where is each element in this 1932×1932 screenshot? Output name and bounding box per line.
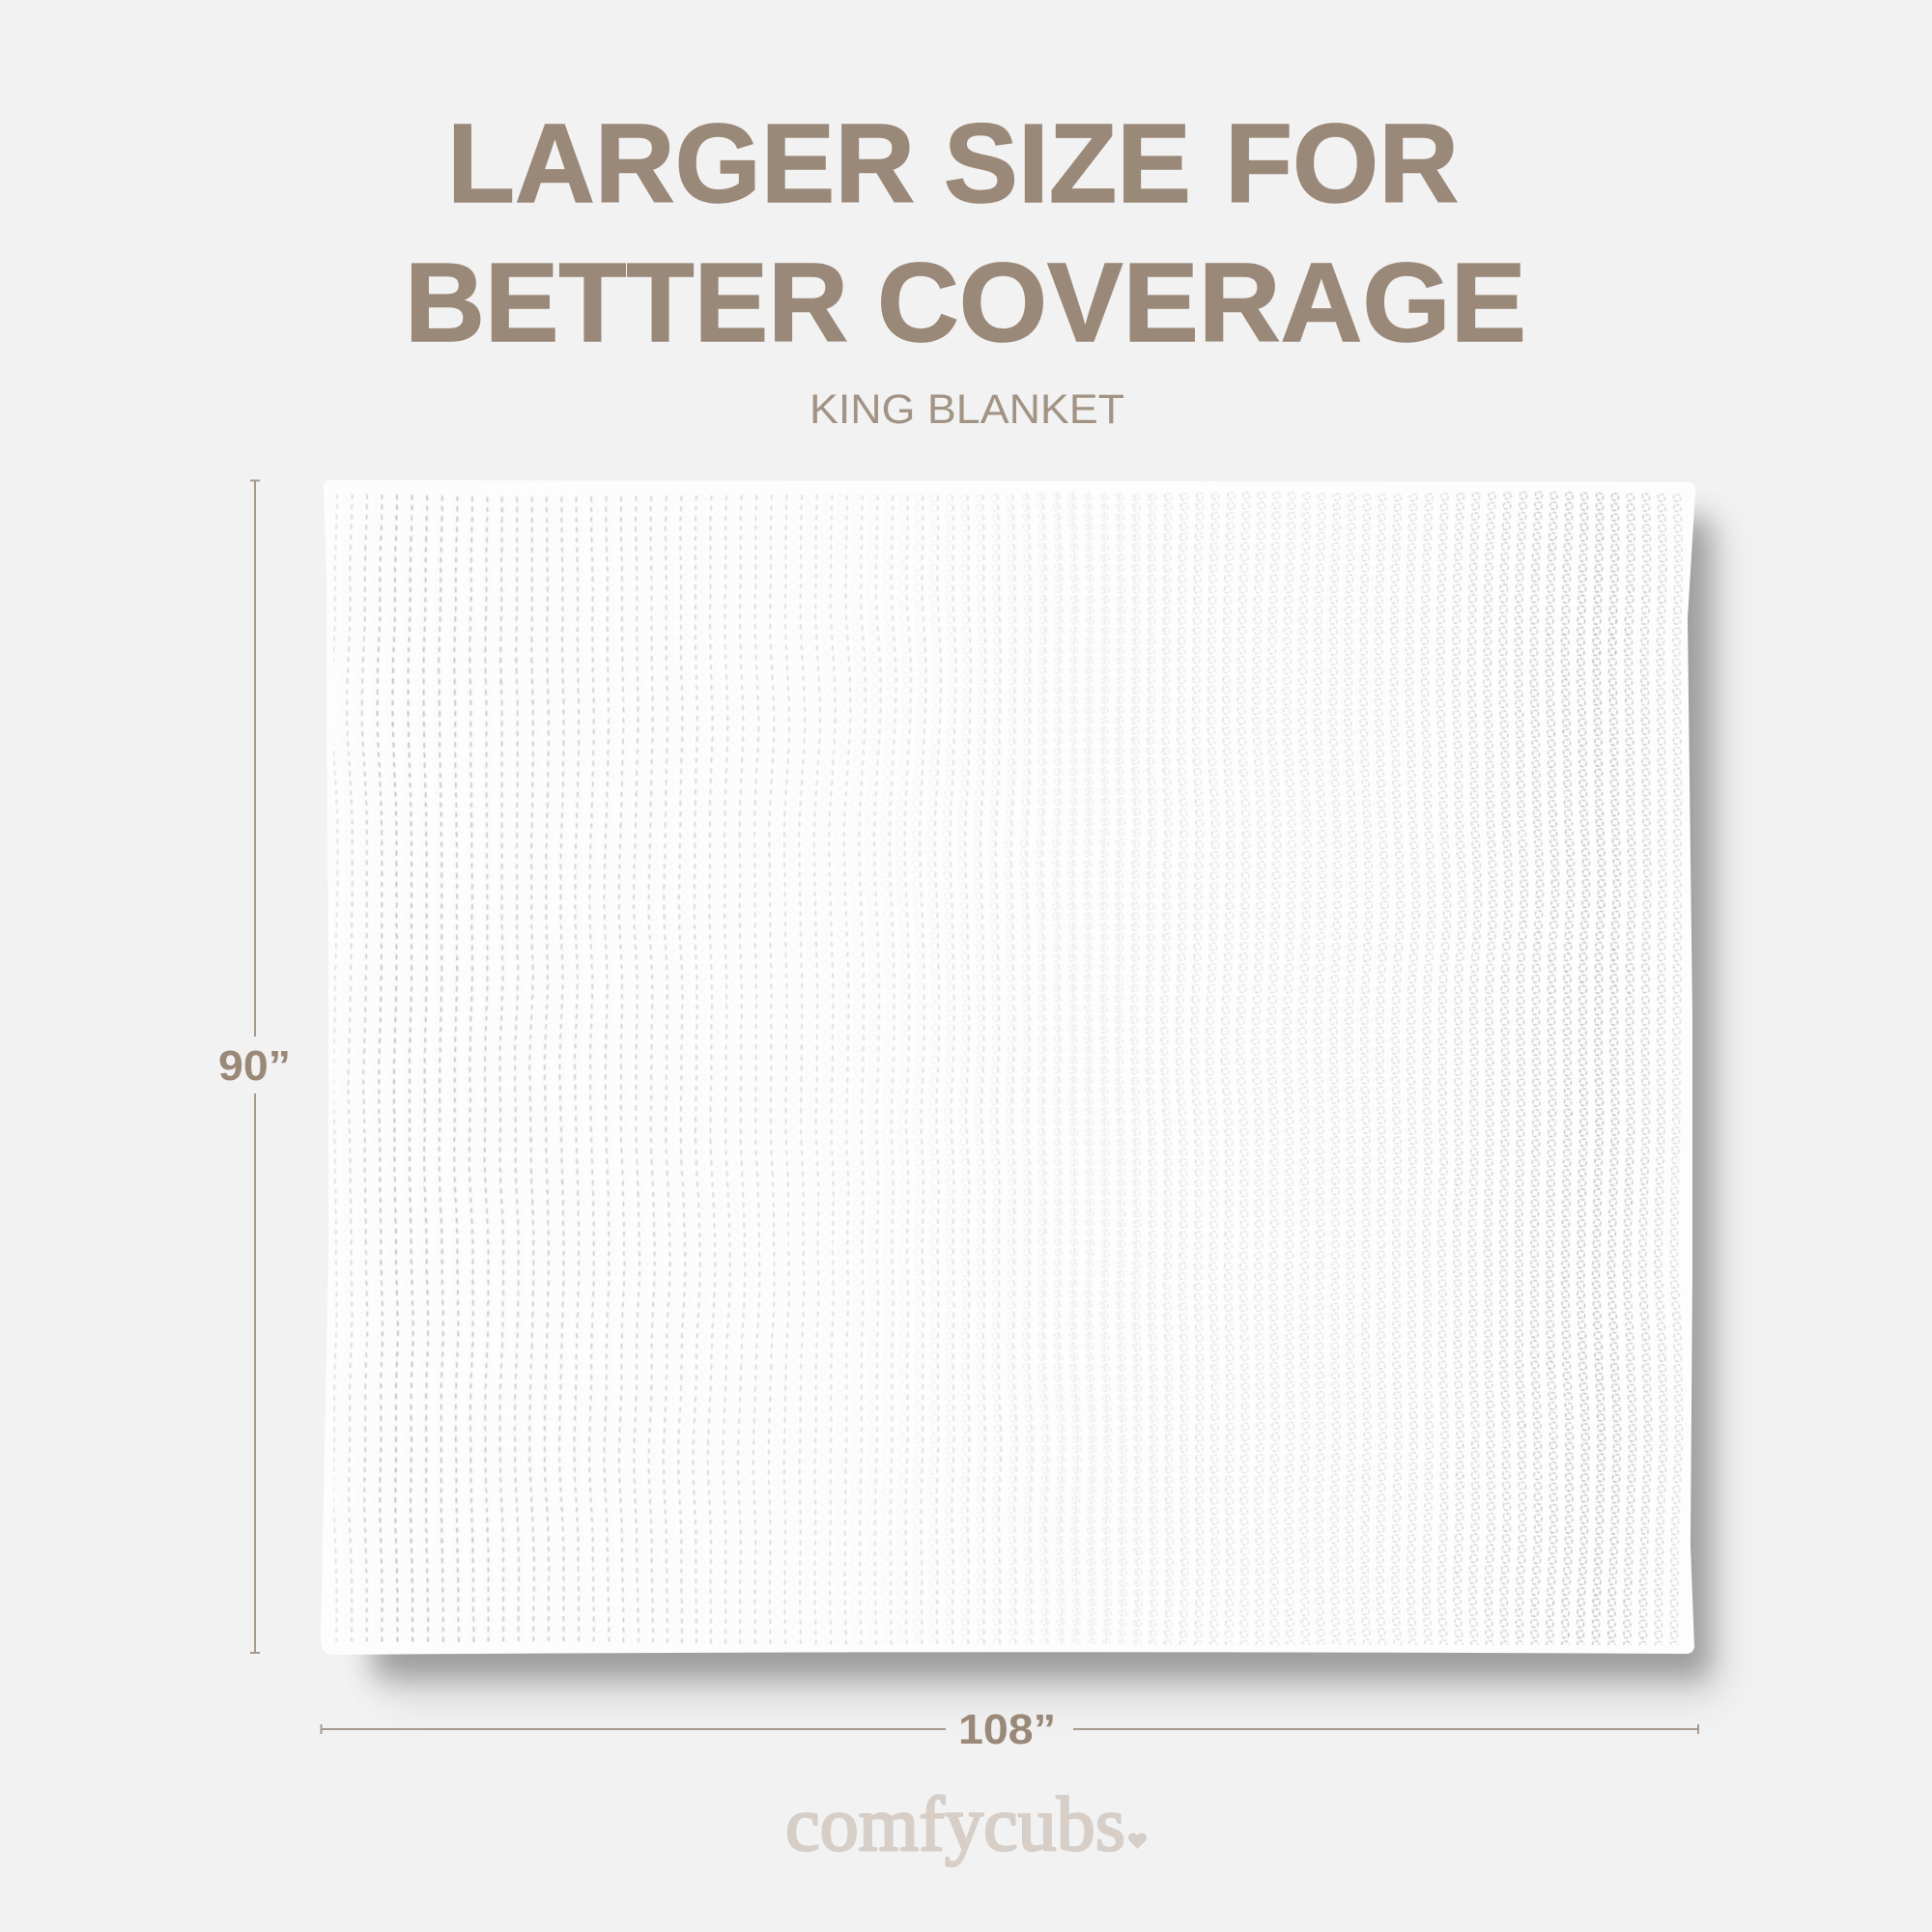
subtitle: KING BLANKET — [810, 386, 1124, 433]
width dimension line — [321, 1706, 1698, 1753]
blanket shadow — [372, 517, 1726, 1705]
blanket image — [314, 473, 1726, 1705]
height dimension line — [218, 481, 291, 1653]
brand logo: comfycubs — [785, 1782, 1125, 1867]
title: LARGER — [447, 100, 915, 226]
blanket fabric — [314, 473, 1705, 1662]
title: COVERAGE — [877, 240, 1526, 365]
title: BETTER — [405, 240, 848, 365]
icon: heart — [1128, 1833, 1147, 1849]
height label: 90” — [218, 1042, 291, 1090]
width label: 108” — [958, 1706, 1056, 1753]
title: SIZE — [944, 100, 1191, 226]
title — [405, 100, 1526, 365]
title: FOR — [1225, 100, 1459, 226]
